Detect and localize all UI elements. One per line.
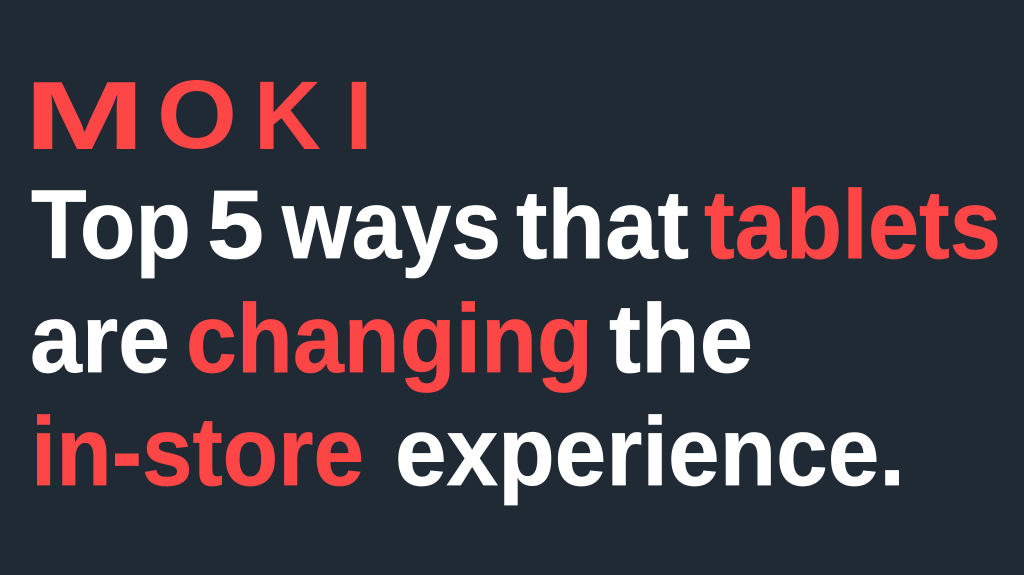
headline line 2: are: [30, 284, 170, 393]
headline line 1: [31, 170, 1001, 279]
headline line 2: the: [609, 284, 753, 393]
headline line 1: 5: [207, 170, 264, 279]
headline line 3: experience.: [395, 397, 905, 506]
headline line 1: that: [516, 170, 689, 279]
headline line 1: ways: [281, 170, 501, 279]
headline: [30, 170, 1001, 506]
headline line 2: changing: [186, 284, 593, 393]
logo: MOKI wordmark: [24, 60, 373, 170]
headline line 1: Top: [31, 170, 191, 279]
headline line 2: [30, 284, 753, 393]
logo: MOKI wordmark: I: [345, 61, 373, 170]
headline line 3: [31, 397, 905, 506]
headline line 1: tablets: [704, 170, 1001, 279]
headline line 3: in-store: [31, 397, 364, 506]
logo: MOKI wordmark: M: [24, 61, 145, 170]
logo: MOKI wordmark: O: [157, 60, 237, 169]
logo: MOKI wordmark: K: [254, 61, 321, 170]
